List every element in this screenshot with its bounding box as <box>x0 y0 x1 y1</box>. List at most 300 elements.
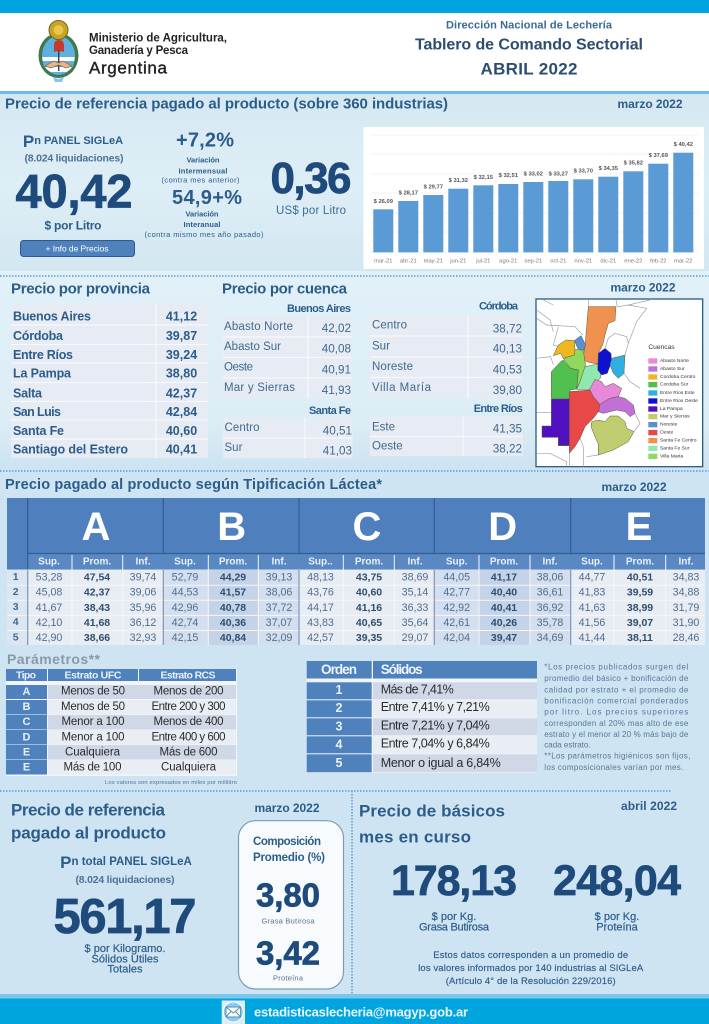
card: average composition: 3,80 <box>256 876 320 914</box>
table rows: Sup. and Inf. values: 35,64 <box>402 617 428 629</box>
map legend: Santa Fe Sur <box>660 445 690 451</box>
panel: variations: Variación <box>186 156 220 164</box>
footnote: **Los parámetros higiénicos son fijos, <box>544 752 690 760</box>
table rows: Sup. and Inf. values: 43,76 <box>307 587 334 599</box>
table: Buenos Aires basins <box>223 303 352 398</box>
table rows: Sup. and Inf. values: 42,77 <box>443 587 470 599</box>
footnote: los composicionales varían por mes. <box>544 763 683 772</box>
table: Entre Ríos basins: Oeste <box>372 441 403 453</box>
table rows: Prom. values: 43,75 <box>356 572 382 584</box>
card: average composition: Composición <box>253 836 321 848</box>
table: hygienic parameters: Menor a 100 <box>62 716 124 728</box>
panel: basic prices: 178,13 <box>391 857 517 905</box>
map legend: Noreste <box>660 422 678 428</box>
panel: basic prices: Precio de básicos <box>359 802 505 820</box>
table: Buenos Aires basins: 41,93 <box>322 384 351 397</box>
bar chart: monthly reference price: $ 35,82 <box>624 160 643 166</box>
panel: total reference price: Precio de referencia <box>11 800 166 820</box>
table: Córdoba basins: 40,53 <box>493 364 522 376</box>
bar chart: monthly reference price: $ 26,09 <box>374 199 394 205</box>
table rows: Sup. and Inf. values: 35,96 <box>130 602 156 614</box>
footnote: bonificación comercial ponderados <box>544 696 688 706</box>
table: hygienic parameters: Estrato UFC <box>64 670 122 682</box>
footer band <box>0 994 709 1024</box>
table rows: Sup. and Inf. values: 38,69 <box>402 572 428 584</box>
table: solids order: Entre 7,41% y 7,21% <box>381 700 490 714</box>
table rows: Sup. and Inf. values: 44,17 <box>307 602 334 614</box>
footer email: estadisticaslecheria@magyp.gob.ar <box>254 1004 468 1020</box>
table: solids order: Más de 7,41% <box>381 682 454 696</box>
table: milk typing prices: D <box>488 505 517 549</box>
bar chart: monthly reference price: mar-22 <box>674 258 692 264</box>
icon: envelope <box>222 1000 245 1024</box>
table: milk typing prices: Sup.. <box>308 556 333 568</box>
table rows: Sup. and Inf. values: 37,07 <box>266 617 292 629</box>
panel: basic prices: Proteína <box>596 922 639 934</box>
bar chart: monthly reference price: jul-21 <box>475 258 490 264</box>
bar chart: monthly reference price: $ 32,15 <box>474 175 494 181</box>
ministry name: Ministerio de Agricultura, <box>89 32 227 44</box>
panel: basic prices: (Artículo 4° de la Resolución 229/2016) <box>446 976 616 987</box>
table rows: Sup. and Inf. values: 41,83 <box>579 587 605 599</box>
map legend: La Pampa <box>660 406 683 412</box>
title block: Tablero de Comando Sectorial <box>415 36 643 54</box>
map legend: Entre Rios Este <box>660 390 695 396</box>
table: Buenos Aires basins: 40,91 <box>322 364 351 376</box>
card: average composition: 3,42 <box>256 934 320 972</box>
table: milk typing prices: Inf. <box>678 556 694 568</box>
table rows: Sup. and Inf. values: 38,06 <box>537 572 563 584</box>
map: dairy basins <box>536 299 703 467</box>
table: hygienic parameters: Estrato RCS <box>160 670 216 682</box>
table: hygienic parameters: Cualquiera <box>161 761 217 773</box>
table: Santa Fe basins: 41,03 <box>323 444 352 458</box>
table rows: Sup. and Inf. values: 34,69 <box>537 632 563 644</box>
card: average composition: Promedio (%) <box>253 852 325 864</box>
bar chart: monthly reference price: $ 33,70 <box>574 168 593 174</box>
panel: variations: (contra mes anterior) <box>162 176 240 184</box>
table: milk typing prices: Sup. <box>581 556 603 568</box>
bar chart: monthly reference price: may-21 <box>424 258 443 264</box>
table rows: Sup. and Inf. values: 44,53 <box>172 587 198 599</box>
table rows: Sup. and Inf. values: 42,92 <box>443 602 470 614</box>
table rows: Sup. and Inf. values: 42,61 <box>443 617 470 629</box>
table: solids order: Orden <box>321 662 357 677</box>
table rows: Prom. values: 41,16 <box>356 602 382 614</box>
bar chart: monthly reference price: ago-21 <box>499 258 517 264</box>
bar chart: monthly reference price: mar-21 <box>374 258 392 264</box>
table: milk typing prices: Prom. <box>490 556 518 568</box>
table rows: Sup. and Inf. values: 53,28 <box>36 572 62 584</box>
icon: coat of arms of Argentina <box>38 20 78 82</box>
table rows: Prom. values: 39,35 <box>356 632 382 644</box>
table rows: Sup. and Inf. values: 39,13 <box>266 572 292 584</box>
footnote: cada estrato. <box>544 740 591 750</box>
panel: price per litre <box>16 132 132 232</box>
table rows: Sup. and Inf. values: 39,74 <box>130 572 156 584</box>
bar chart: monthly reference price: $ 28,17 <box>399 190 418 196</box>
table: hygienic parameters: E <box>23 746 30 758</box>
bar chart: monthly reference price: $ 31,32 <box>449 178 468 184</box>
panel: price per litre: $ por Litro <box>44 218 102 232</box>
table: milk typing prices: 2 <box>13 586 19 598</box>
footnote: corresponden al 20% mas alto de ese <box>544 719 689 728</box>
table rows: Sup. and Inf. values: 52,79 <box>172 572 198 584</box>
panel: variations: 54,9+% <box>172 187 242 209</box>
table: hygienic parameters: A <box>23 686 31 698</box>
table: milk typing prices: E <box>626 505 652 549</box>
map legend: Santa Fe Centro <box>660 438 697 444</box>
table: milk typing prices: Inf. <box>136 556 151 568</box>
map legend: Villa Maria <box>660 453 683 459</box>
table rows: Sup. and Inf. values: 39,06 <box>130 587 156 599</box>
table: Córdoba basins: 40,13 <box>493 342 522 356</box>
table rows: Prom. values: 40,60 <box>356 587 382 599</box>
table: milk typing prices: C <box>353 505 381 549</box>
table: hygienic parameters: Menos de 200 <box>154 686 224 698</box>
table: milk typing prices: 5 <box>13 632 19 644</box>
bar chart: monthly reference price: jun-21 <box>449 258 466 264</box>
table rows: Sup. and Inf. values: 31,79 <box>673 602 699 614</box>
table: Córdoba basins: Villa María <box>372 382 432 394</box>
panel: total reference price: 561,17 <box>54 890 196 944</box>
table rows: Sup. and Inf. values: 32,09 <box>266 632 292 644</box>
table: hygienic parameters: B <box>23 701 31 713</box>
table: solids order <box>307 661 537 773</box>
panel: variations: Interanual <box>184 220 220 229</box>
table rows: Sup. and Inf. values: 41,67 <box>36 602 62 614</box>
table rows: Sup. and Inf. values: 34,83 <box>673 572 699 584</box>
panel: basic prices: 248,04 <box>553 857 681 905</box>
table rows: Prom. values: 38,99 <box>627 602 653 614</box>
table: solids order: 4 <box>336 738 343 752</box>
table: Córdoba basins: Córdoba <box>479 301 519 313</box>
table rows: Sup. and Inf. values: 42,74 <box>172 617 198 629</box>
bar chart: monthly reference price: $ 33,02 <box>524 172 543 178</box>
table: hygienic parameters: Más de 600 <box>160 746 218 758</box>
table: Buenos Aires basins: Oeste <box>224 362 253 374</box>
bar chart: monthly reference price: $ 40,42 <box>674 142 693 148</box>
panel: total reference price: Sólidos Utiles <box>92 954 159 966</box>
table rows: Prom. values: 40,36 <box>220 617 246 629</box>
table rows: Sup. and Inf. values: 36,12 <box>130 617 156 629</box>
panel: variations: Variación <box>186 210 219 218</box>
panel: basic prices: Grasa Butirosa <box>419 922 490 934</box>
ministry name <box>89 32 227 78</box>
panel: price per litre: Pn PANEL SIGLeA <box>23 132 123 150</box>
table rows: Prom. values: 39,59 <box>627 587 653 599</box>
table: hygienic parameters: Tipo <box>16 670 36 682</box>
table: price by province: Santa Fe <box>13 424 64 438</box>
card: average composition <box>238 821 344 989</box>
panel: variations <box>144 130 264 239</box>
panel: US dollar price: US$ por Litro <box>276 205 346 217</box>
table: Córdoba basins <box>370 301 523 398</box>
table: Santa Fe basins: Sur <box>224 442 243 454</box>
table: milk typing prices: Sup. <box>446 556 468 568</box>
table rows: Prom. values: 40,78 <box>220 602 246 614</box>
map legend: Cordoba Centro <box>660 374 696 380</box>
bar chart: monthly reference price: $ 29,77 <box>424 184 443 190</box>
button: info de precios: + Info de Precios <box>46 244 108 254</box>
footnote: calidad por estrato + el promedio de <box>544 686 689 694</box>
table: hygienic parameters: Menos de 50 <box>61 686 125 698</box>
bar chart: monthly reference price: dic-21 <box>600 258 616 264</box>
table: solids order: Entre 7,21% y 7,04% <box>381 718 490 732</box>
table: hygienic parameters: Más de 100 <box>64 761 122 773</box>
table rows: Sup. and Inf. values: 31,90 <box>673 617 699 629</box>
map legend: Entre Rios Oeste <box>660 398 698 404</box>
footnote: *Los precios publicados surgen del <box>544 662 689 672</box>
table rows: Sup. and Inf. values <box>36 572 699 644</box>
table rows: Sup. and Inf. values: 42,04 <box>443 632 470 644</box>
footnote <box>544 662 690 772</box>
table rows: Sup. and Inf. values: 41,44 <box>579 632 605 644</box>
table: hygienic parameters: E <box>23 762 30 774</box>
table: hygienic parameters: Entre 400 y 600 <box>152 731 226 743</box>
table rows: Sup. and Inf. values: 42,10 <box>36 617 62 629</box>
table: milk typing prices: Sup. <box>38 556 60 568</box>
table rows: Sup. and Inf. values: 36,61 <box>537 587 563 599</box>
panel: total reference price <box>11 800 320 976</box>
table rows: Sup. and Inf. values: 42,15 <box>172 632 198 644</box>
table: price by province: Santiago del Estero <box>13 442 128 456</box>
table rows: Sup. and Inf. values: 32,93 <box>130 632 156 644</box>
bar chart: monthly reference price: $ 32,51 <box>499 173 519 179</box>
table: milk typing prices: Prom. <box>355 556 383 568</box>
panel: basic prices: Estos datos corresponden a un promedio de <box>433 950 628 961</box>
date: marzo 2022: marzo 2022 <box>602 480 667 494</box>
header band <box>0 0 709 94</box>
panel: basic prices: mes en curso <box>359 828 471 846</box>
table: Buenos Aires basins: Buenos Aires <box>287 303 351 315</box>
table: price by province: 38,80 <box>166 366 197 380</box>
panel: variations: (contra mismo mes año pasado) <box>144 230 264 239</box>
table: Entre Ríos basins: Entre Ríos <box>474 403 523 415</box>
table rows: Sup. and Inf. values: 41,63 <box>579 602 605 614</box>
table: hygienic parameters: Menos de 50 <box>61 701 125 713</box>
table rows: Sup. and Inf. values: 42,96 <box>172 602 198 614</box>
table: price by province: Entre Ríos <box>13 348 73 362</box>
table rows: Sup. and Inf. values: 44,05 <box>443 572 470 584</box>
table: price by province: 39,87 <box>166 329 197 343</box>
panel: variations: +7,2% <box>176 130 234 152</box>
bar chart: monthly reference price: sep-21 <box>524 258 542 264</box>
table: hygienic parameters: Entre 200 y 300 <box>152 701 226 713</box>
bar chart: monthly reference price: $ 33,27 <box>549 172 568 178</box>
table: price by province: 42,84 <box>166 405 197 419</box>
table: Córdoba basins: 39,80 <box>493 384 522 397</box>
table: hygienic parameters: Menor a 100 <box>62 731 124 743</box>
table: solids order: Sólidos <box>381 662 423 677</box>
table rows: Prom. values: 39,07 <box>627 617 653 629</box>
table rows: Prom. values: 42,37 <box>84 587 110 599</box>
heading: precio por cuenca: Precio por cuenca <box>222 280 348 298</box>
table: hygienic parameters: C <box>23 716 31 728</box>
bar chart: monthly reference price <box>364 127 704 269</box>
table: hygienic parameters: Cualquiera <box>65 746 121 758</box>
table: price by province: Córdoba <box>13 329 64 343</box>
table rows: Sup. and Inf. values: 34,88 <box>673 587 699 599</box>
table: price by province: Salta <box>13 386 43 400</box>
table rows: Sup. and Inf. values: 42,57 <box>307 632 334 644</box>
bar chart: monthly reference price: $ 37,69 <box>649 153 669 159</box>
table rows: Prom. values: 40,40 <box>491 587 517 599</box>
table: Santa Fe basins <box>223 405 353 458</box>
date: marzo 2022: marzo 2022 <box>618 97 683 111</box>
table: milk typing prices: Prom. <box>83 556 111 568</box>
map legend: Cordoba Sur <box>660 382 689 388</box>
date: marzo 2022: marzo 2022 <box>610 280 676 294</box>
table rows: Sup. and Inf. values: 28,46 <box>673 632 699 644</box>
bar chart: monthly reference price: $ 34,35 <box>599 166 619 172</box>
table rows: Prom. values: 40,84 <box>220 632 246 644</box>
ministry name: Ganadería y Pesca <box>89 45 189 57</box>
title block: ABRIL 2022 <box>480 60 578 78</box>
table rows: Sup. and Inf. values: 36,92 <box>537 602 563 614</box>
bar chart: monthly reference price: nov-21 <box>574 258 592 264</box>
bar chart: monthly reference price: abr-21 <box>400 258 417 264</box>
table: solids order: 3 <box>336 720 343 734</box>
table rows: Prom. values: 40,65 <box>356 617 382 629</box>
panel: total reference price: (8.024 liquidaciones) <box>76 874 174 886</box>
table: milk typing prices: Inf. <box>542 556 558 568</box>
table rows: Prom. values: 44,29 <box>220 572 246 584</box>
bar chart: monthly reference price: oct-21 <box>550 258 566 264</box>
card: average composition: Grasa Butirosa <box>262 916 315 926</box>
table: price by province: La Pampa <box>13 366 72 380</box>
table: solids order: Menor o igual a 6,84% <box>381 756 501 770</box>
table: hygienic parameters: Menos de 400 <box>154 716 224 728</box>
table rows: Prom. values: 40,51 <box>627 572 653 584</box>
table: price by province: 39,24 <box>166 348 197 362</box>
table: Buenos Aires basins: 40,08 <box>322 342 351 356</box>
table: hygienic parameters: D <box>23 732 31 744</box>
panel: basic prices: $ por Kg. <box>595 911 639 923</box>
footnote: por litro. Los precios superiores <box>544 708 688 716</box>
button: info de precios <box>20 240 134 256</box>
table: milk typing prices: Inf. <box>408 556 423 568</box>
panel: US dollar price: 0,36 <box>270 154 352 203</box>
table: price by province: 40,60 <box>166 424 197 438</box>
panel: total reference price: $ por Kilogramo. <box>84 943 166 955</box>
map legend: Oeste <box>660 430 674 436</box>
table: Córdoba basins: Noreste <box>372 361 413 373</box>
table: solids order: 2 <box>336 701 343 715</box>
table rows: Sup. and Inf. values: 36,33 <box>402 602 428 614</box>
map legend: Abasto Sur <box>660 366 685 372</box>
table: Santa Fe basins: Centro <box>224 422 260 434</box>
table: milk typing prices: Prom. <box>219 556 247 568</box>
table: milk typing prices: Prom. <box>626 556 654 568</box>
panel: total reference price: marzo 2022 <box>254 801 320 815</box>
table: Entre Ríos basins: 38,22 <box>493 442 522 456</box>
table: milk typing prices: A <box>82 505 110 549</box>
table rows: Prom. values: 40,26 <box>491 617 517 629</box>
table rows: Sup. and Inf. values: 41,56 <box>579 617 605 629</box>
table: Santa Fe basins: Santa Fe <box>309 405 351 417</box>
heading: precio por provincia: Precio por provincia <box>11 280 151 298</box>
table rows: Sup. and Inf. values: 37,72 <box>266 602 292 614</box>
panel: price per litre: (8.024 liquidaciones) <box>24 152 124 164</box>
bar chart: monthly reference price: feb-22 <box>650 258 667 264</box>
map legend: Abasto Norte <box>660 358 689 364</box>
table rows: Sup. and Inf. values: 48,13 <box>307 572 334 584</box>
table rows: Prom. values: 38,66 <box>84 632 110 644</box>
table: milk typing prices: B <box>217 505 246 549</box>
title block <box>415 20 643 78</box>
table: milk typing prices: Inf. <box>272 556 287 568</box>
panel: total reference price: Totales <box>108 964 143 976</box>
card: average composition: Proteína <box>273 974 304 982</box>
table rows: Sup. and Inf. values: 45,08 <box>36 587 62 599</box>
map legend: Cuencas <box>648 344 675 351</box>
note: units: Los valores son expresados en miles por mililitro <box>105 780 237 786</box>
table: Buenos Aires basins: Mar y Sierras <box>224 382 295 394</box>
ministry name: Argentina <box>89 58 168 78</box>
table: Córdoba basins: Sur <box>372 341 390 353</box>
table: Santa Fe basins: 40,51 <box>323 424 352 438</box>
table: price by province <box>11 304 208 458</box>
table rows: Sup. and Inf. values: 44,77 <box>579 572 605 584</box>
table: solids order: Entre 7,04% y 6,84% <box>381 736 490 750</box>
table: solids order: 5 <box>336 756 343 770</box>
table rows: Sup. and Inf. values: 35,14 <box>402 587 428 599</box>
panel: basic prices: $ por Kg. <box>432 911 476 923</box>
table: price by province: Buenos Aires <box>13 310 91 324</box>
map legend <box>648 344 698 459</box>
footnote: promedio del básico + bonificación de <box>544 674 689 683</box>
table: hygienic parameters <box>6 669 237 776</box>
panel: basic prices: los valores informados por 140 industrias al SIGLeA <box>418 963 644 974</box>
table: Entre Ríos basins <box>370 403 523 456</box>
table: Entre Ríos basins: 41,35 <box>493 422 522 436</box>
table: solids order: 1 <box>336 683 343 697</box>
table rows: Prom. values: 38,43 <box>84 602 110 614</box>
table: Buenos Aires basins: Abasto Sur <box>224 341 281 353</box>
table rows: Prom. values: 41,57 <box>220 587 246 599</box>
panel: price per litre: 40,42 <box>16 164 132 218</box>
table: Buenos Aires basins: 42,02 <box>322 322 351 335</box>
table: milk typing prices: Sup. <box>174 556 196 568</box>
table rows: Prom. values: 41,17 <box>491 572 517 584</box>
panel: total reference price: pagado al producto <box>11 824 166 842</box>
table rows: Sup. and Inf. values: 38,06 <box>266 587 292 599</box>
bar chart: monthly reference price: ene-22 <box>624 258 642 264</box>
table: price by province: 41,12 <box>166 310 197 324</box>
table rows: Prom. values: 40,41 <box>491 602 517 614</box>
table rows: Sup. and Inf. values: 42,90 <box>36 632 62 644</box>
table: price by province: 40,41 <box>166 442 197 456</box>
table: Entre Ríos basins: Este <box>372 421 395 433</box>
heading: precio de referencia: Precio de referencia pagado al producto (sobre 360 industrias) <box>5 96 448 112</box>
table rows: Prom. values: 47,54 <box>84 572 110 584</box>
title block: Dirección Nacional de Lechería <box>446 20 613 32</box>
footnote: estrato y el menor al 20 % más bajo de <box>544 730 689 739</box>
table rows: Prom. values <box>84 572 653 644</box>
table rows: Sup. and Inf. values: 29,07 <box>402 632 428 644</box>
table rows: Prom. values: 38,11 <box>627 632 653 644</box>
table: Córdoba basins: 38,72 <box>493 322 522 336</box>
table rows: Sup. and Inf. values: 43,83 <box>307 617 334 629</box>
table: milk typing prices: 1 <box>13 571 19 583</box>
table: milk typing prices: 3 <box>13 601 19 613</box>
panel: basic prices <box>359 799 681 987</box>
panel: total reference price: Pn total PANEL SIGLeA <box>60 852 192 872</box>
table: price by province: San Luis <box>13 405 61 419</box>
table: Córdoba basins: Centro <box>372 320 407 332</box>
table: milk typing prices <box>7 498 705 645</box>
